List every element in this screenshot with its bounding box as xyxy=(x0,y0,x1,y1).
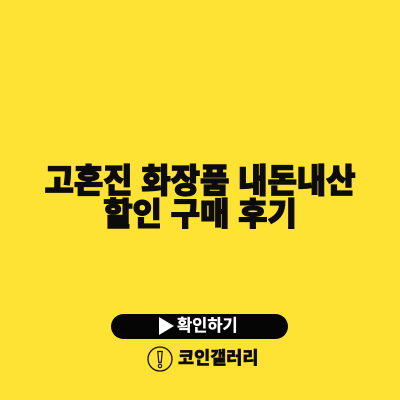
title line 2: 할인 구매 후기 xyxy=(103,196,297,232)
brand name: 코인갤러리 xyxy=(178,348,258,368)
icon: play triangle xyxy=(159,317,174,335)
button label: 확인하기 xyxy=(177,317,238,335)
button: confirm xyxy=(111,314,288,339)
brand xyxy=(147,346,258,372)
icon: exclamation circle xyxy=(147,346,173,372)
title line 1: 고혼진 화장품 내돈내산 xyxy=(44,162,355,200)
title xyxy=(44,162,356,232)
